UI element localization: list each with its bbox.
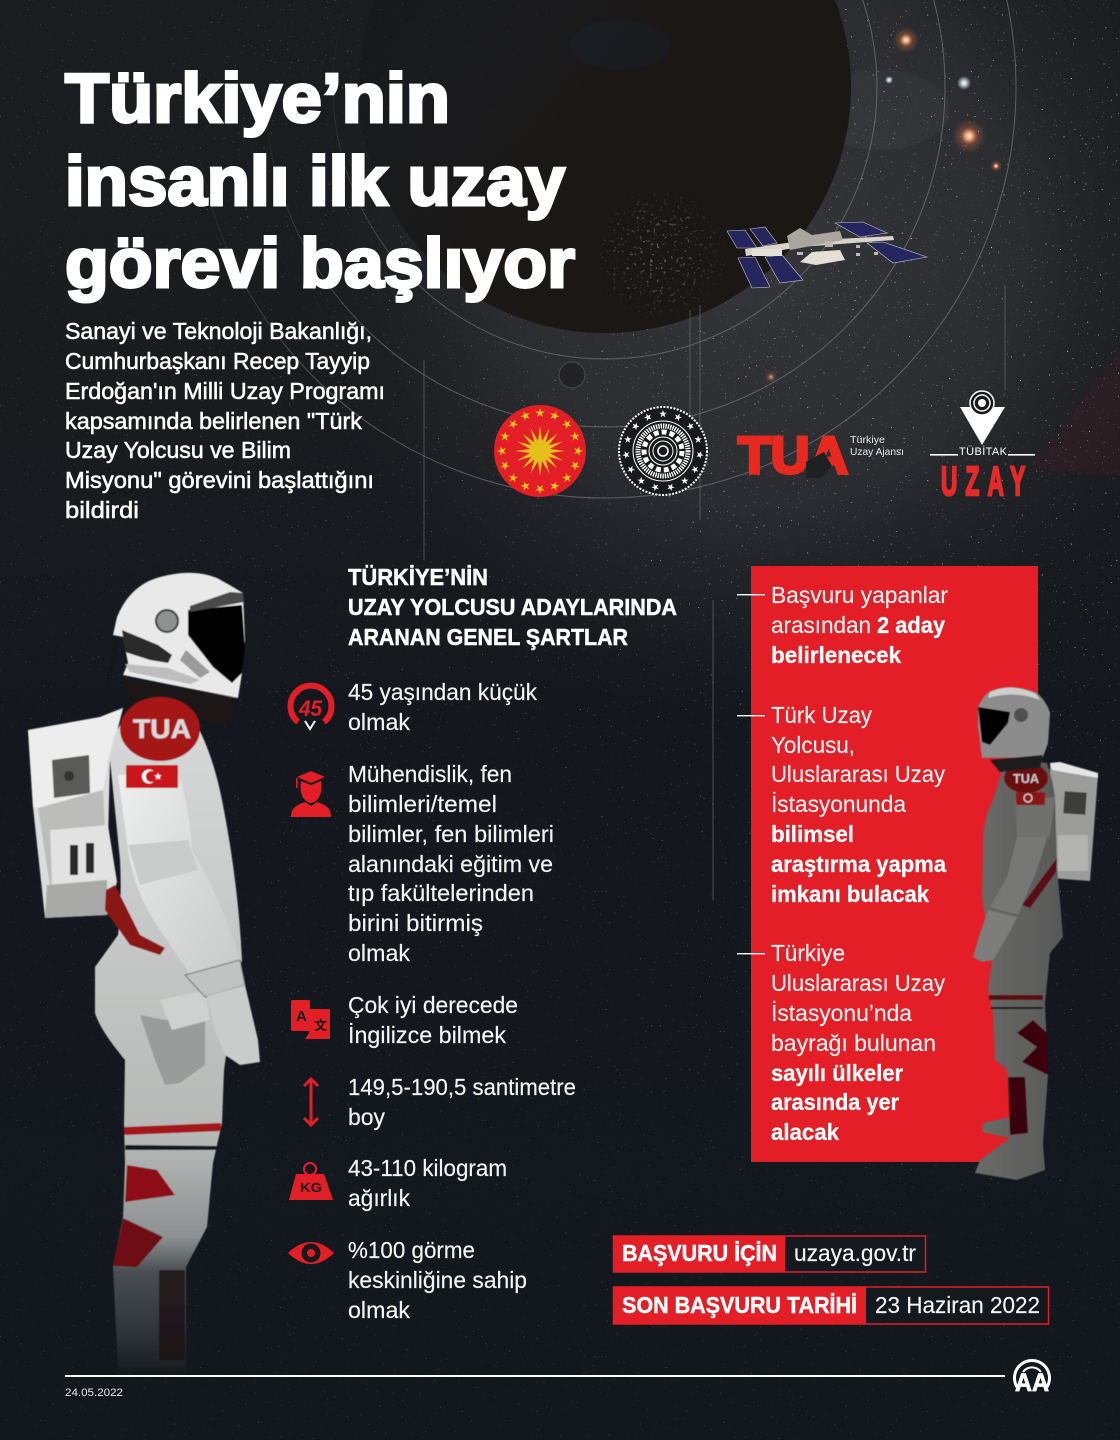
panel: red info box: Yolcusu,	[771, 732, 855, 758]
intro text: Sanayi ve Teknoloji Bakanlığı,	[65, 318, 372, 344]
panel: red info box: Türk Uzay	[771, 702, 872, 728]
requirements heading	[348, 564, 677, 650]
callout: deadline: 23 Haziran 2022	[875, 1292, 1040, 1318]
intro text: Misyonu" görevini başlattığını	[65, 467, 374, 493]
title: görevi başlıyor	[65, 224, 575, 302]
callout: application site	[613, 1236, 926, 1272]
astronaut: right figure: TUA	[1013, 771, 1040, 786]
logo: Anadolu Agency: AA	[1015, 1369, 1049, 1397]
logo: TUBITAK UZAY: TÜBİTAK	[959, 445, 1008, 458]
logo: TUBITAK UZAY	[930, 391, 1035, 505]
intro text	[65, 318, 385, 523]
requirement: weight: ağırlık	[348, 1185, 410, 1211]
footer rule	[65, 1375, 1005, 1377]
requirement: education: birini bitirmiş	[348, 910, 483, 936]
icon: age 45: 45	[298, 696, 323, 721]
bright stars	[764, 27, 1002, 384]
panel: red info box: Başvuru yapanlar	[771, 582, 948, 608]
orbit rings	[194, 0, 1016, 900]
requirement: education: tıp fakültelerinden	[348, 880, 534, 906]
requirement: English	[291, 992, 518, 1048]
icon: kilogram weight	[289, 1163, 333, 1200]
panel: red info box: belirlenecek	[771, 642, 901, 668]
requirement: education: Mühendislik, fen	[348, 761, 512, 787]
icon: translate	[291, 1000, 330, 1039]
requirement: weight: 43-110 kilogram	[348, 1155, 507, 1181]
requirement: vision: keskinliğine sahip	[348, 1267, 527, 1293]
panel: red info box: alacak	[771, 1119, 839, 1145]
panel: red info box: Türkiye	[771, 940, 845, 966]
title: insanlı ilk uzay	[65, 142, 565, 220]
panel: red info box: Uluslararası Uzay	[771, 761, 945, 787]
intro text: bildirdi	[65, 497, 139, 523]
requirements heading: ARANAN GENEL ŞARTLAR	[348, 624, 628, 650]
date: 24.05.2022	[65, 1387, 123, 1399]
callout: deadline	[613, 1287, 1048, 1324]
logo: TUBITAK UZAY: UZAY	[941, 459, 1025, 505]
logo: presidency emblem	[494, 405, 586, 497]
icon: height arrow	[304, 1079, 318, 1125]
planet earth	[359, 0, 851, 333]
astronaut: right figure	[973, 687, 1098, 1180]
small moon	[559, 362, 585, 388]
icon: age 45	[290, 686, 331, 729]
requirement: English: Çok iyi derecede	[348, 992, 518, 1018]
requirement: education: alanındaki eğitim ve	[348, 851, 553, 877]
panel: red info box: İstasyonunda	[771, 791, 906, 817]
logo: TUA: TUA	[738, 427, 848, 485]
icon: translate: 文	[314, 1018, 327, 1033]
logo: TUA: Uzay Ajansı	[850, 446, 904, 458]
panel: red info box: İstasyonu’nda	[771, 1000, 912, 1026]
intro text: Cumhurbaşkanı Recep Tayyip	[65, 348, 370, 374]
requirement: education: bilimler, fen bilimleri	[348, 821, 554, 847]
title	[65, 59, 575, 302]
requirement: English: İngilizce bilmek	[348, 1022, 506, 1048]
panel: red info box: imkanı bulacak	[771, 881, 929, 907]
panel: red info box: bilimsel	[771, 821, 854, 847]
requirement: height: boy	[348, 1104, 385, 1130]
requirement: weight	[289, 1155, 507, 1211]
panel: red info box: arasında yer	[771, 1089, 899, 1115]
panel: red info box: 2 aday	[877, 612, 945, 638]
logo: ministry seal	[619, 407, 707, 495]
astronaut: left figure	[28, 573, 260, 1372]
panel: red info box	[737, 566, 1038, 1162]
icon: graduate	[291, 771, 331, 817]
requirement: vision: olmak	[348, 1297, 410, 1323]
requirement: education	[291, 761, 554, 966]
icon: translate: A	[296, 1008, 307, 1025]
requirement: height: 149,5-190,5 santimetre	[348, 1074, 576, 1100]
intro text: kapsamında belirlenen "Türk	[65, 408, 363, 434]
intro text: Uzay Yolcusu ve Bilim	[65, 437, 291, 463]
logo: TUA: Türkiye	[850, 434, 885, 446]
panel: red info box: sayılı ülkeler	[771, 1060, 903, 1086]
callout: application site: uzaya.gov.tr	[794, 1240, 916, 1266]
requirement: height	[304, 1074, 576, 1130]
callout: application site: BAŞVURU İÇİN	[622, 1240, 777, 1266]
panel: red info box: arasından	[771, 612, 871, 638]
requirement: age: olmak	[348, 709, 410, 735]
panel: red info box: Uluslararası Uzay	[771, 970, 945, 996]
intro text: Erdoğan'ın Milli Uzay Programı	[65, 378, 385, 404]
logo: TUA	[738, 427, 904, 485]
icon: eye	[288, 1242, 334, 1264]
space station	[727, 222, 927, 288]
requirement: age: 45 yaşından küçük	[348, 679, 537, 705]
callout: deadline: SON BAŞVURU TARİHİ	[622, 1292, 857, 1318]
requirement: vision: %100 görme	[348, 1237, 475, 1263]
title: Türkiye’nin	[65, 59, 450, 137]
icon: kilogram weight: KG	[300, 1180, 322, 1195]
requirement: age	[290, 679, 537, 735]
astronaut: left figure: TUA	[133, 714, 191, 744]
requirement: education: bilimleri/temel	[348, 791, 497, 817]
requirement: education: olmak	[348, 940, 410, 966]
requirements heading: UZAY YOLCUSU ADAYLARINDA	[348, 594, 677, 620]
panel: red info box: araştırma yapma	[771, 851, 946, 877]
panel: red info box: bayrağı bulunan	[771, 1030, 936, 1056]
requirements heading: TÜRKİYE’NİN	[348, 564, 488, 590]
requirement: vision	[288, 1237, 527, 1323]
